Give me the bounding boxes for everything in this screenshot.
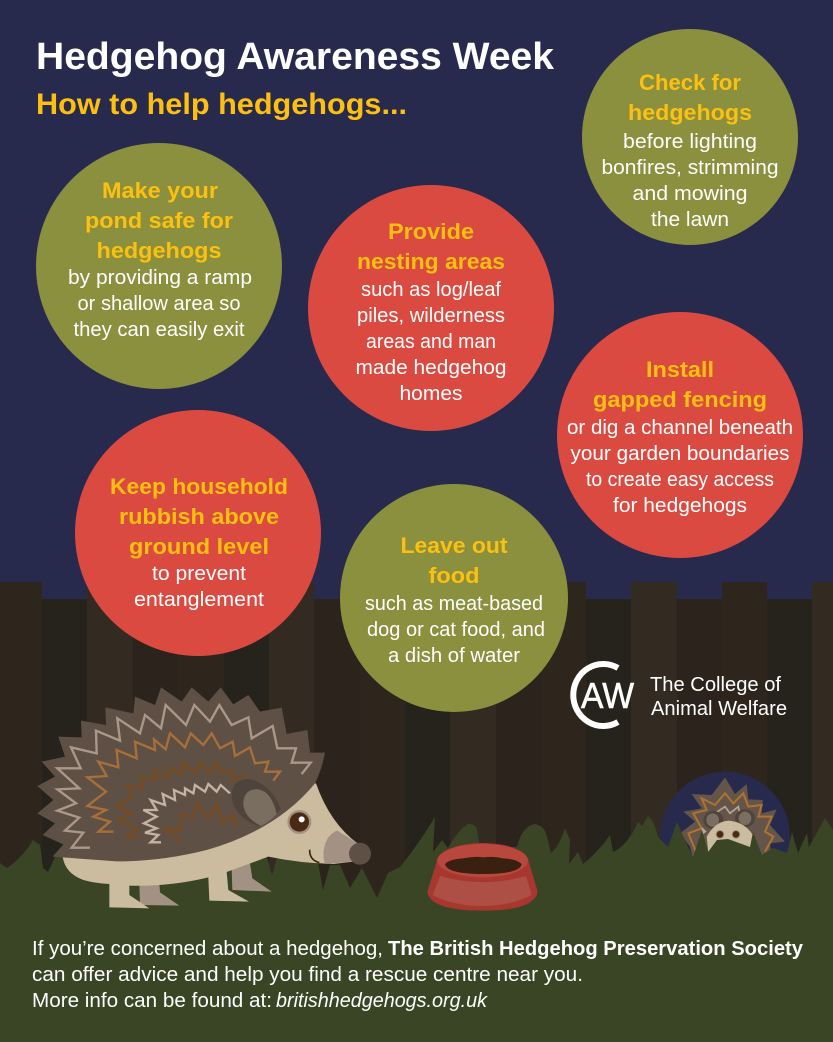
panel: gapped fencing: your garden boundaries — [570, 443, 790, 465]
snout — [323, 831, 358, 864]
panel: check for hedgehogs — [582, 29, 798, 245]
subtitle: How to help hedgehogs... — [36, 88, 407, 121]
ear — [232, 779, 281, 827]
title: Hedgehog Awareness Week — [36, 36, 555, 78]
panel: household rubbish: Keep household — [110, 474, 288, 499]
panel: nesting areas: made hedgehog — [356, 357, 506, 379]
panel: check for hedgehogs: the lawn — [651, 209, 729, 231]
footer text: The British Hedgehog Preservation Society — [388, 938, 804, 960]
panel: gapped fencing: for hedgehogs — [613, 495, 747, 517]
panel: leave out food — [340, 484, 568, 712]
panel: leave out food: Leave out — [400, 533, 508, 558]
panel: leave out food: a dish of water — [388, 645, 520, 667]
logo: The College of Animal Welfare — [573, 664, 787, 726]
large hedgehog — [37, 687, 371, 908]
panel: household rubbish: rubbish above — [119, 504, 279, 529]
logo wordmark: The College of — [650, 674, 781, 696]
panel: nesting areas: such as log/leaf — [361, 279, 501, 301]
logo mark: AW — [581, 675, 634, 716]
dog bowl — [427, 843, 538, 911]
panel: pond safety: pond safe for — [85, 208, 233, 233]
footer text: britishhedgehogs.org.uk — [276, 990, 488, 1012]
small hedgehog peeking through gap in the fence — [660, 772, 790, 902]
footer text — [32, 938, 804, 1012]
back legs — [139, 863, 272, 906]
panel: gapped fencing: Install — [646, 357, 714, 382]
panel: nesting areas — [308, 185, 554, 431]
panel: nesting areas: nesting areas — [357, 249, 505, 274]
footer text: If you’re concerned about a hedgehog, — [32, 938, 383, 960]
panel: leave out food: food — [428, 563, 480, 588]
panel: check for hedgehogs: hedgehogs — [628, 100, 752, 125]
panel: pond safety: hedgehogs — [96, 238, 222, 263]
logo mark — [573, 664, 634, 726]
panel: pond safety: by providing a ramp — [68, 267, 252, 289]
panel: gapped fencing: to create easy access — [586, 469, 774, 491]
panel: pond safety: they can easily exit — [74, 319, 245, 341]
panel: nesting areas: piles, wilderness — [357, 305, 505, 327]
footer text: can offer advice and help you find a rescue centre near you. — [32, 964, 583, 986]
panel: pond safety — [36, 143, 282, 389]
panel: household rubbish: to prevent — [152, 563, 246, 585]
panel: household rubbish: ground level — [129, 534, 269, 559]
logo wordmark — [650, 674, 787, 720]
smile — [310, 850, 319, 863]
panel: pond safety: Make your — [102, 178, 218, 203]
panel: household rubbish: entanglement — [134, 589, 264, 611]
panel: leave out food: such as meat-based — [365, 593, 543, 615]
panel: check for hedgehogs: and mowing — [632, 183, 748, 205]
panel: pond safety: or shallow area so — [78, 293, 240, 315]
panel: nesting areas: areas and man — [366, 331, 496, 353]
panel: check for hedgehogs: before lighting — [623, 131, 757, 153]
panel: gapped fencing — [557, 312, 803, 558]
logo wordmark: Animal Welfare — [651, 698, 787, 720]
panel: gapped fencing: or dig a channel beneath — [567, 417, 793, 439]
grass — [0, 816, 833, 1042]
panel: gapped fencing: gapped fencing — [593, 387, 767, 412]
food — [445, 857, 522, 874]
cream body and front legs — [63, 783, 358, 908]
panel: leave out food: dog or cat food, and — [367, 619, 545, 641]
eye — [287, 810, 311, 834]
panel: check for hedgehogs: Check for — [639, 70, 741, 95]
nose — [349, 843, 371, 865]
panel: nesting areas: Provide — [388, 219, 474, 244]
spiny coat — [37, 687, 325, 861]
footer text: More info can be found at: — [32, 990, 272, 1012]
spine zigzags — [57, 705, 311, 848]
panel: household rubbish — [75, 410, 321, 656]
fence — [0, 582, 833, 912]
panel: nesting areas: homes — [400, 383, 462, 405]
panel: check for hedgehogs: bonfires, strimming — [602, 157, 778, 179]
